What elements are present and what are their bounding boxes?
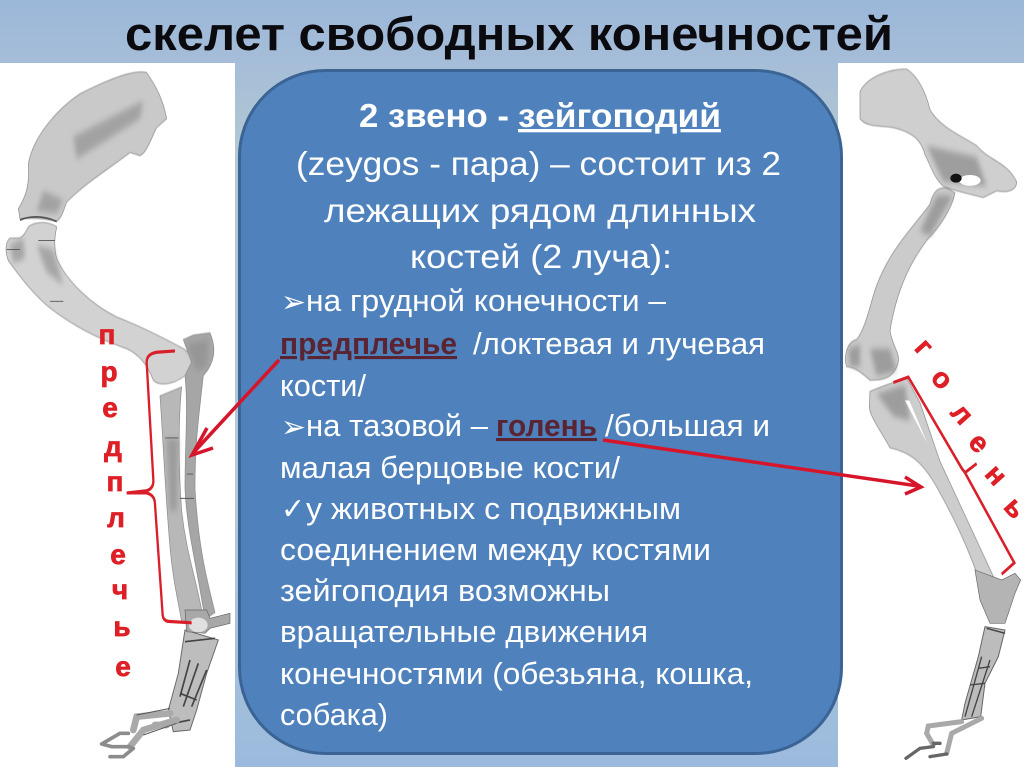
- bone: radius: [160, 387, 203, 621]
- illustration: thoracic limb skeleton: [6, 72, 215, 621]
- panel heading: [359, 97, 721, 134]
- check item: соединением между костями: [280, 532, 711, 567]
- bullet: thoracic limb: предплечье: [280, 326, 457, 361]
- vertical label: forearm: е: [102, 392, 118, 423]
- bullet: pelvic limb: [280, 408, 770, 485]
- arrow: shin: [603, 440, 921, 494]
- diagonal label: shin: г: [909, 332, 940, 361]
- bone: ulna: [183, 333, 215, 619]
- bullet: thoracic limb: ➢: [281, 285, 306, 320]
- diagonal label: shin: [909, 332, 1024, 524]
- left image panel: [0, 63, 235, 767]
- bone details: [7, 217, 194, 498]
- bone: pelvis: [860, 69, 1017, 198]
- diagonal label: shin: о: [925, 362, 960, 395]
- diagonal label: shin: н: [979, 458, 1014, 491]
- vertical label: forearm: [99, 319, 131, 682]
- bullet: pelvic limb: /большая и: [605, 408, 770, 443]
- diagonal label: shin: е: [963, 427, 996, 459]
- bullet: pelvic limb: малая берцовые кости/: [280, 450, 620, 485]
- bullet: thoracic limb: /локтевая и лучевая: [473, 326, 765, 361]
- vertical label: forearm: л: [107, 502, 125, 533]
- bone: humerus: [6, 223, 192, 384]
- bullet: pelvic limb: на тазовой –: [306, 408, 489, 443]
- intro text: лежащих рядом длинных: [324, 192, 757, 229]
- bullet: pelvic limb: ➢: [281, 410, 306, 445]
- vertical label: forearm: п: [107, 466, 123, 497]
- bracket: shin: [893, 377, 1014, 574]
- check item: конечностями (обезьяна, кошка,: [280, 656, 753, 691]
- right image panel: [838, 63, 1024, 767]
- bone: femur: [845, 188, 955, 380]
- check item: ✓: [281, 492, 305, 527]
- arrow: forearm: [192, 360, 279, 455]
- vertical label: forearm: п: [99, 319, 115, 350]
- panel heading: зейгоподий: [518, 97, 721, 134]
- hock and foot skeleton: [906, 570, 1021, 758]
- panel heading: 2 звено -: [359, 97, 509, 134]
- tibia gap: [905, 401, 927, 443]
- bone: scapula: [18, 72, 167, 221]
- vertical label: forearm: д: [104, 431, 122, 462]
- bullet: thoracic limb: на грудной конечности –: [306, 283, 667, 318]
- bone shading: [10, 101, 208, 511]
- carpus and paw skeleton: [102, 610, 230, 757]
- intro text: [296, 145, 781, 275]
- vertical label: forearm: е: [115, 651, 131, 682]
- check item: вращательные движения: [280, 614, 648, 649]
- diagonal label: shin: л: [945, 397, 980, 431]
- check item: зейгоподия возможны: [280, 573, 610, 608]
- pelvis opening: [950, 174, 981, 186]
- illustration: pelvic limb skeleton: [845, 69, 1017, 601]
- vertical label: forearm: р: [100, 356, 118, 387]
- bullet: thoracic limb: [280, 283, 765, 403]
- bullet: thoracic limb: кости/: [280, 368, 366, 403]
- vertical label: forearm: ч: [112, 574, 128, 605]
- bracket: forearm: [127, 351, 192, 623]
- panel: zeugopodium description: [240, 70, 842, 754]
- bone: tibia and fibula: [869, 378, 1000, 601]
- intro text: (zeygos - пара) – состоит из 2: [296, 145, 781, 182]
- check item: собака): [280, 697, 388, 732]
- vertical label: forearm: ь: [113, 611, 131, 642]
- vertical label: forearm: е: [110, 539, 126, 570]
- bullet: pelvic limb: голень: [496, 408, 597, 443]
- title: скелет свободных конечностей: [125, 7, 893, 60]
- check item: у животных с подвижным: [306, 491, 681, 526]
- bone shading: [848, 146, 987, 421]
- check item: [280, 491, 753, 732]
- intro text: костей (2 луча):: [410, 238, 672, 275]
